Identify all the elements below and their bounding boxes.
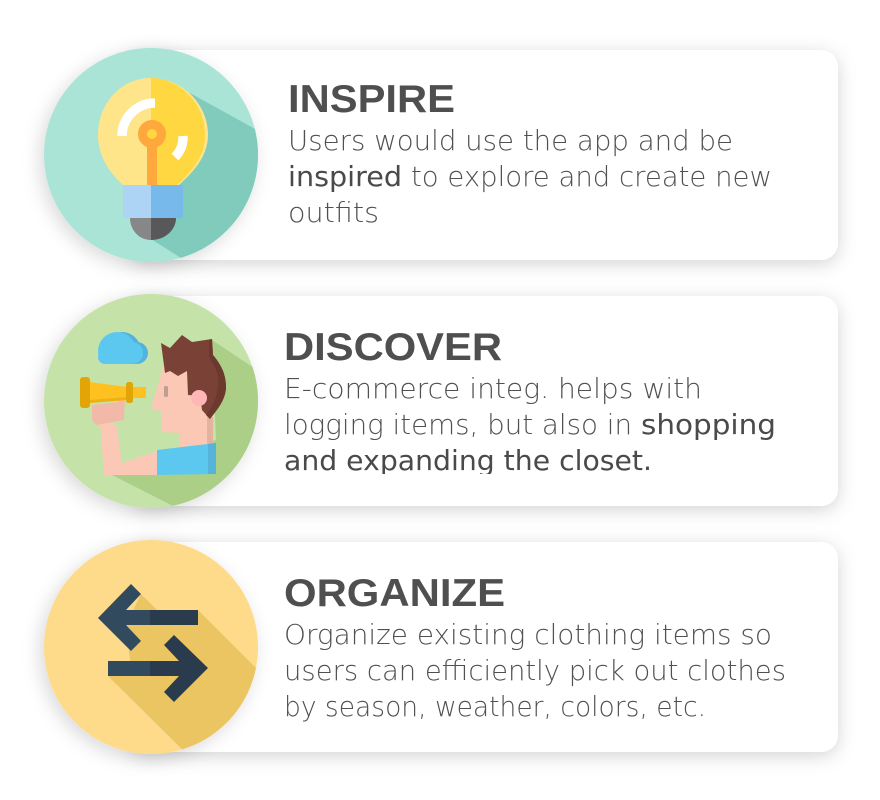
text block: organize description: by season, weather, colors, etc. [284,691,706,723]
icon: two opposing arrows in yellow circle [44,540,285,775]
text block: discover description: and expanding the closet. [284,445,652,477]
text block: discover description: shopping [641,409,776,441]
text block: discover description: logging items, but also in [284,409,632,441]
heading: ORGANIZE: ORGANIZE [284,572,505,615]
icon part: cloud [98,332,148,364]
heading: DISCOVER: DISCOVER [284,326,502,369]
panel: organize [44,540,838,775]
text block: discover description: E-commerce integ. helps with [284,373,702,405]
text block: organize description [284,619,786,723]
icon: light bulb in teal circle [44,48,275,275]
text block: discover description [284,373,776,477]
text block: inspire description: to explore and create new [411,161,772,193]
text block: inspire description: Users would use the app and be [288,125,733,157]
text block: inspire description [288,125,772,229]
card background: organize [130,542,838,752]
text block: inspire description: inspired [288,161,402,193]
text block: organize description: Organize existing clothing items so [284,619,772,651]
panel: inspire [44,48,838,275]
card background: discover [130,296,838,506]
card background: inspire [130,50,838,260]
text block: organize description: users can efficiently pick out clothes [284,655,786,687]
text block: inspire description: outfits [288,197,379,229]
heading: INSPIRE: INSPIRE [288,78,455,121]
icon: person with spyglass in green circle [44,294,275,520]
panel: discover [44,294,838,520]
